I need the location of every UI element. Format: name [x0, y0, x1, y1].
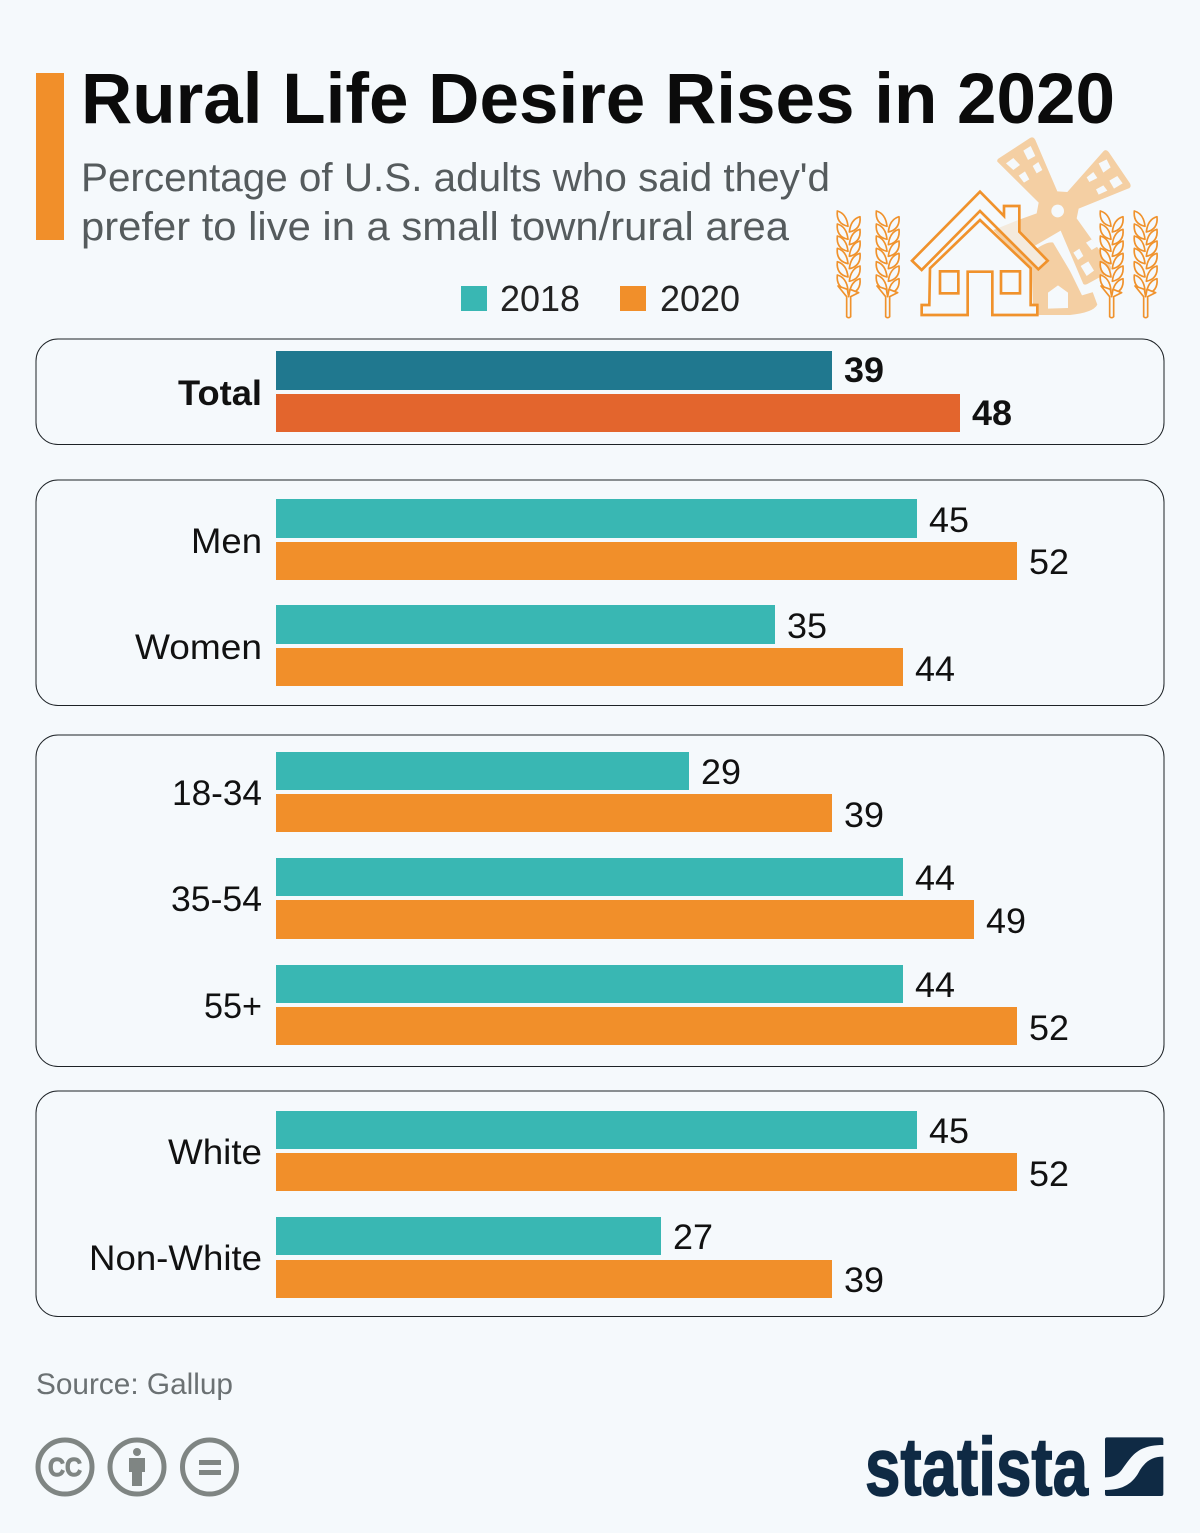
- icon: wheat left 1: [837, 211, 860, 318]
- bar: White 2020: 52: [1029, 1155, 1069, 1194]
- bar: 18-34 2020: 39: [844, 796, 884, 835]
- icon: windmill: [993, 137, 1131, 315]
- bar: Men 2018: [276, 499, 969, 540]
- bar: 18-34 2020: [276, 794, 884, 835]
- label: 55+: 55+: [204, 987, 262, 1026]
- logo mark: [1105, 1437, 1163, 1496]
- bar: Men 2020: [276, 542, 1069, 582]
- icon: attribution: [110, 1440, 164, 1494]
- bar: Women 2018: 35: [787, 607, 827, 646]
- label: Non-White: Non-White: [89, 1239, 262, 1278]
- bar: White 2018: [276, 1111, 969, 1151]
- label: Total: Total: [178, 374, 262, 413]
- statista logo: [865, 1422, 1163, 1513]
- title: Rural Life Desire Rises in 2020: [81, 60, 1115, 139]
- panel: gender: [36, 480, 1164, 706]
- panel: race: [36, 1091, 1164, 1316]
- bar: White 2020: [276, 1153, 1069, 1194]
- legend item 2018: 2018: [500, 278, 580, 319]
- bar: Non-White 2020: [276, 1260, 884, 1300]
- bar: Women 2020: 44: [915, 650, 955, 689]
- legend item 2020: [620, 278, 740, 319]
- bar: White 2018: 45: [929, 1112, 969, 1151]
- bar: Total 2020: [276, 394, 1012, 433]
- bar: Total 2018: 39: [844, 351, 884, 390]
- label: White: White: [168, 1133, 262, 1172]
- bar: 35-54 2020: 49: [986, 902, 1026, 941]
- bar: Total 2020: 48: [972, 394, 1012, 433]
- bar: 55+ 2020: 52: [1029, 1009, 1069, 1048]
- bar: 55+ 2018: [276, 965, 955, 1005]
- legend item 2018: [461, 278, 580, 319]
- bar: 18-34 2018: 29: [701, 753, 741, 792]
- subtitle: prefer to live in a small town/rural area: [81, 205, 790, 249]
- icon: cc: [38, 1440, 92, 1494]
- subtitle: [81, 156, 830, 249]
- bar: Men 2020: 52: [1029, 543, 1069, 582]
- legend: [461, 278, 740, 319]
- bar: 35-54 2018: 44: [915, 859, 955, 898]
- illustration: windmill, house and wheat: [837, 137, 1157, 318]
- panel: total: [36, 339, 1164, 444]
- icon: wheat left 2: [876, 211, 899, 318]
- bar: 18-34 2018: [276, 752, 741, 792]
- label: 35-54: 35-54: [171, 880, 262, 919]
- bar: Women 2018: [276, 605, 827, 646]
- bar: 55+ 2020: [276, 1007, 1069, 1048]
- bar: Non-White 2018: 27: [673, 1218, 713, 1257]
- panel: age: [36, 735, 1164, 1066]
- icon: no derivatives: [182, 1440, 236, 1494]
- bar: Non-White 2018: [276, 1217, 713, 1257]
- bar: Men 2018: 45: [929, 501, 969, 540]
- bar: 55+ 2018: 44: [915, 966, 955, 1005]
- label: Women: Women: [135, 628, 262, 667]
- icon: wheat right 1: [1100, 211, 1123, 318]
- licence icons: [38, 1440, 236, 1494]
- subtitle: Percentage of U.S. adults who said they'd: [81, 156, 830, 200]
- source: Source: Gallup: [36, 1368, 233, 1401]
- bar: 35-54 2020: [276, 900, 1026, 941]
- bar: Women 2020: [276, 648, 955, 689]
- title accent bar: [36, 73, 64, 240]
- label: Men: Men: [191, 522, 262, 561]
- icon: house: [912, 192, 1048, 315]
- bar: 35-54 2018: [276, 858, 955, 898]
- icon: wheat right 2: [1134, 211, 1157, 318]
- legend item 2020: 2020: [660, 278, 740, 319]
- bar: Total 2018: [276, 351, 884, 390]
- label: 18-34: 18-34: [172, 774, 262, 813]
- bar: Non-White 2020: 39: [844, 1261, 884, 1300]
- wordmark: statista: [865, 1422, 1089, 1513]
- icon: cc: CC: [48, 1452, 82, 1482]
